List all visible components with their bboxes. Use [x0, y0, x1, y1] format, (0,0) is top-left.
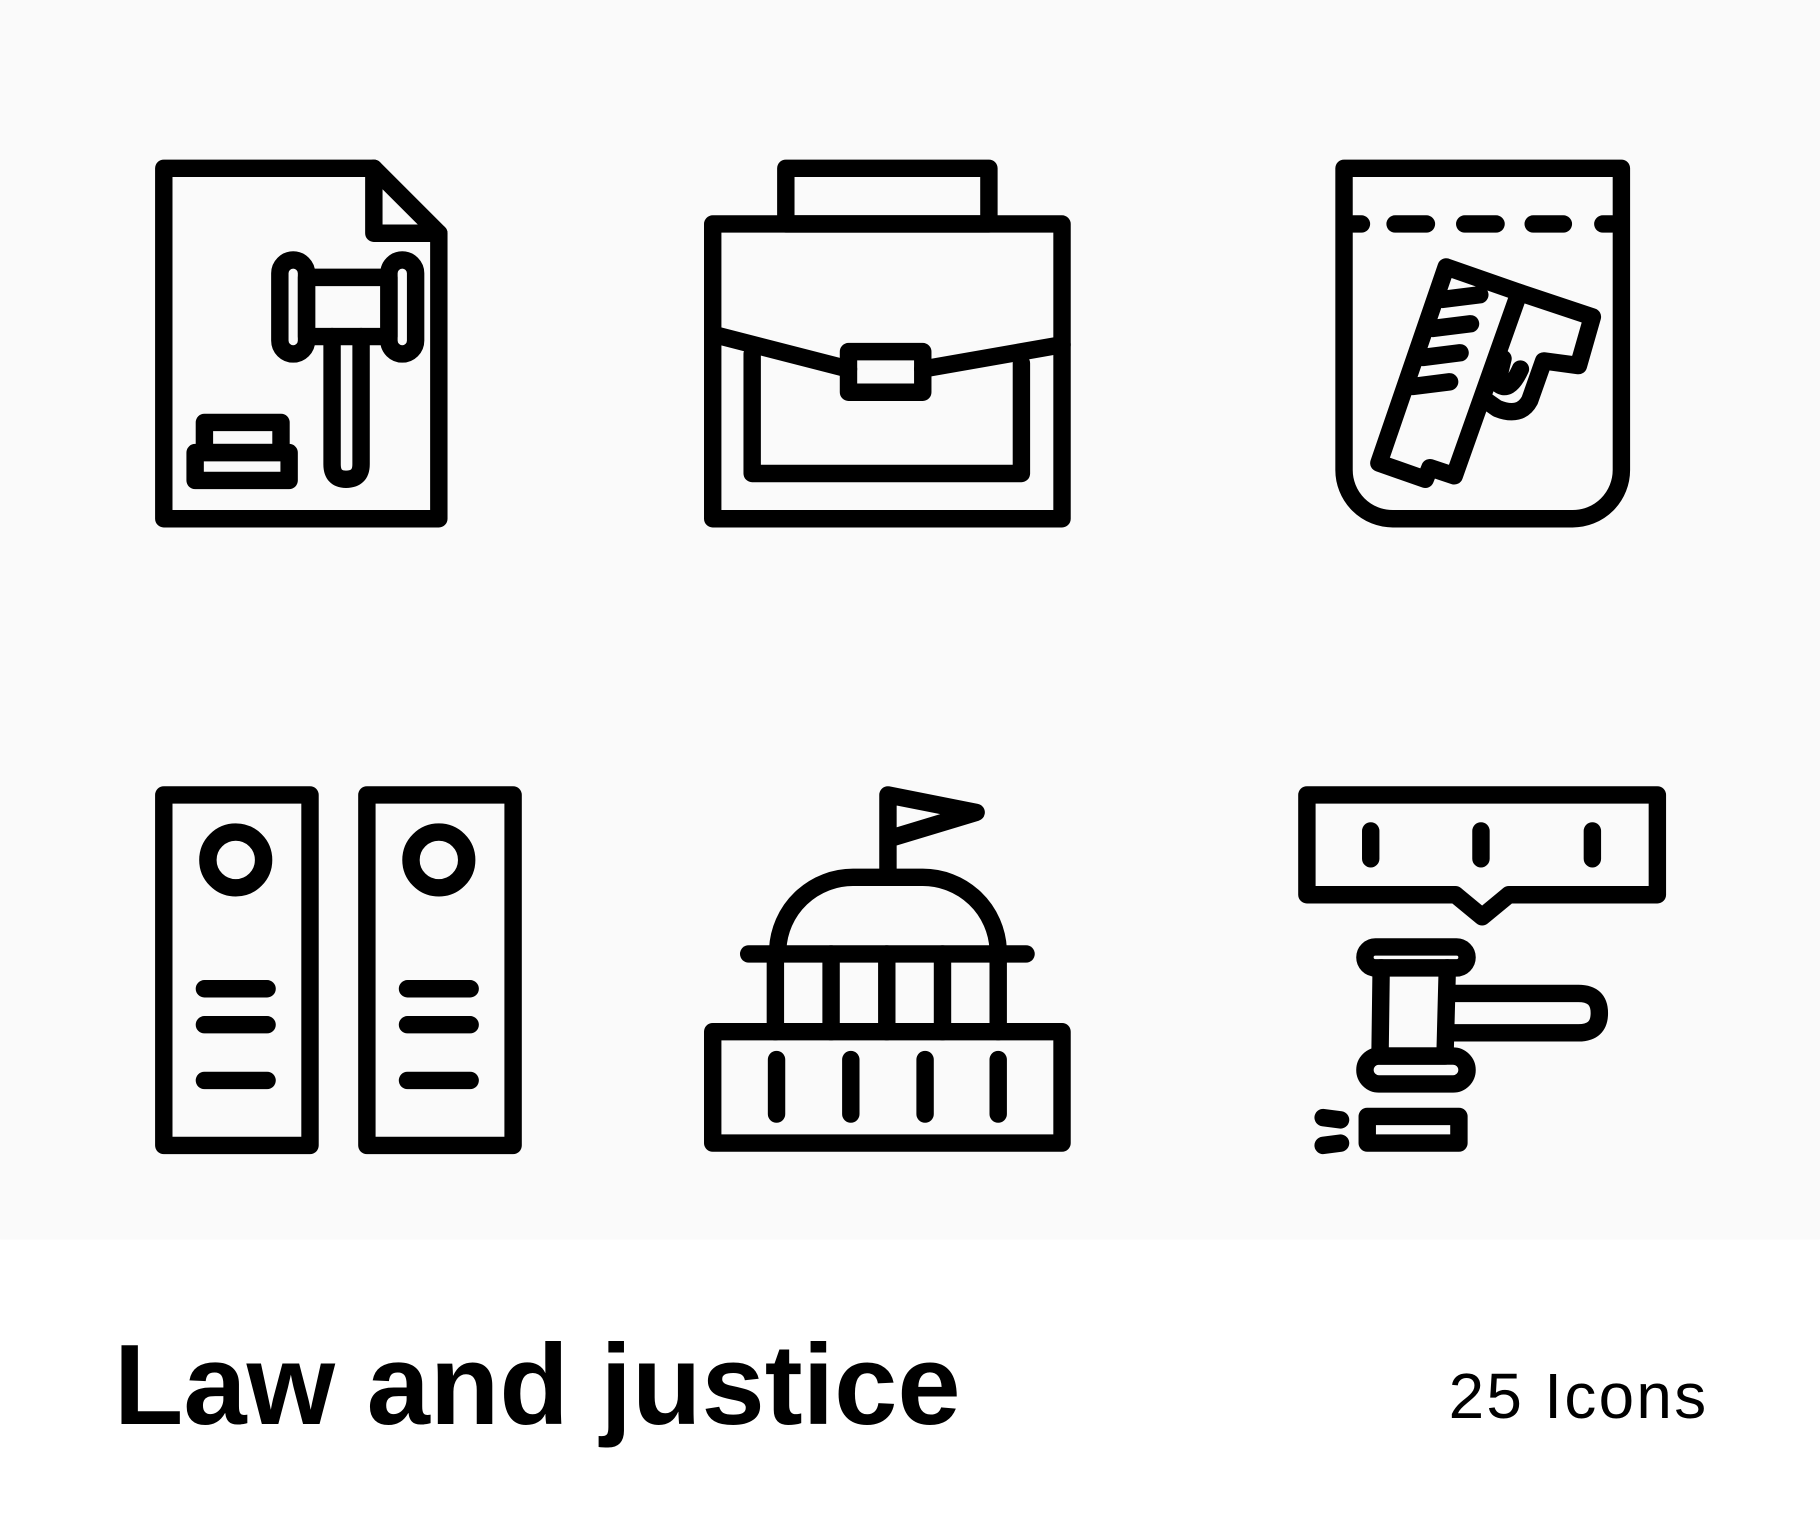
title: Law and justice — [114, 1322, 961, 1449]
icon: briefcase — [713, 168, 1062, 519]
icon: two binders — [164, 795, 513, 1145]
subtitle: icon count: 25 Icons — [1449, 1360, 1708, 1432]
icon: evidence bag with ruler and pen — [1344, 168, 1621, 519]
icon: legal document with gavel — [164, 168, 439, 519]
icon: speech bubble with gavel — [1307, 795, 1657, 1145]
icon: capitol building — [713, 795, 1062, 1143]
